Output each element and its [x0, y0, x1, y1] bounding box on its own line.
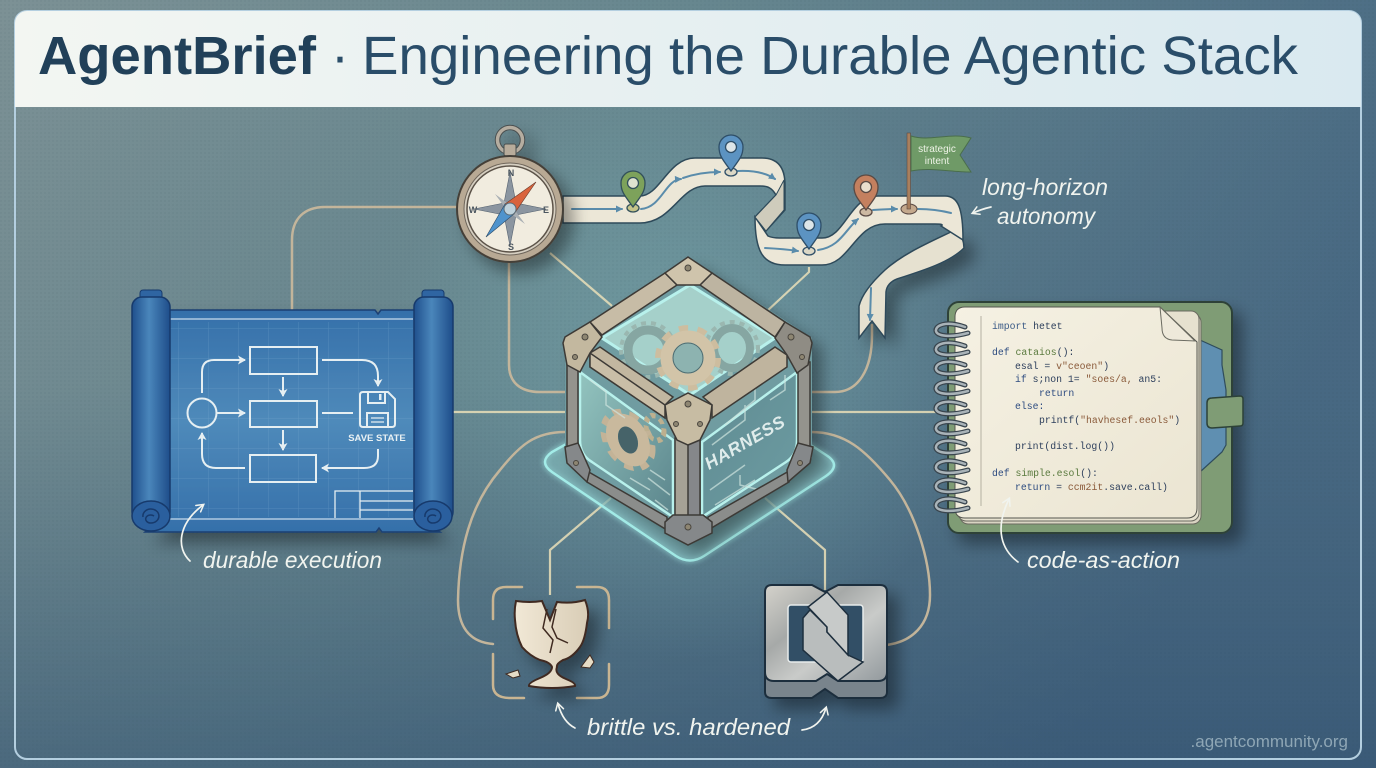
strategic intent flag [901, 133, 971, 214]
link band A [808, 592, 848, 655]
shards [506, 670, 520, 678]
brittle icon [493, 587, 609, 698]
frame bars [567, 273, 810, 530]
ribbon upper band [563, 158, 785, 231]
connectors: glowing lines [453, 253, 936, 595]
brittle vs hardened label: brittle vs. hardened [587, 714, 791, 740]
compass icon: S [508, 242, 514, 252]
map pin: blue lower [797, 213, 821, 255]
compass icon: N [508, 168, 514, 178]
icon: floppy save state [360, 392, 395, 427]
code-as-action label [1001, 499, 1180, 573]
header band [15, 11, 1361, 107]
compass icon: E [543, 205, 549, 215]
notebook clasp [1207, 396, 1243, 428]
code listing: print(dist.log()) [1015, 441, 1115, 452]
corner brackets [563, 257, 813, 545]
page stack [958, 311, 1201, 524]
block base [765, 670, 887, 698]
notebook tab [1200, 340, 1226, 472]
bolts [572, 265, 804, 530]
title: Engineering the Durable Agentic Stack [362, 26, 1299, 86]
long-horizon autonomy label: autonomy [997, 203, 1096, 229]
right roller [414, 290, 453, 531]
link holes [788, 605, 863, 662]
connectors: ropes [292, 207, 930, 645]
code listing: return [1039, 388, 1074, 399]
title: · [331, 26, 349, 86]
cube body [565, 257, 812, 545]
long-horizon autonomy label: long-horizon [982, 174, 1108, 200]
circuit traces [590, 375, 785, 510]
link band B [803, 610, 863, 681]
code listing [992, 321, 1180, 493]
ribbon fold shade [755, 180, 784, 231]
code page [955, 307, 1197, 518]
ribbon tail [859, 229, 964, 338]
map pin: blue [719, 135, 743, 176]
code listing: esal = v"ceoen") [1015, 361, 1109, 372]
cube glass faces [602, 285, 775, 395]
code listing: if s;non 1= "soes/a, an5: [1015, 374, 1162, 385]
strategic intent flag: intent [925, 156, 949, 167]
hardened link icon [765, 585, 887, 698]
map pin: green [621, 171, 645, 212]
block face [765, 585, 887, 681]
left roller [132, 290, 170, 531]
notebook [936, 302, 1243, 533]
code-as-action label: code-as-action [1027, 547, 1180, 573]
path arrows [572, 171, 951, 320]
compass icon: W [469, 205, 478, 215]
blueprint scroll [132, 290, 453, 532]
spiral binding [936, 324, 968, 511]
long-horizon autonomy label [973, 174, 1108, 229]
code listing: else: [1015, 401, 1044, 412]
strategic intent flag: strategic [918, 144, 956, 155]
brittle vs hardened label [558, 704, 826, 740]
code listing: def simple.esol(): [992, 468, 1098, 479]
interior gears [621, 322, 758, 387]
durable execution label [181, 505, 382, 573]
watermark: .agentcommunity.org [1191, 732, 1348, 751]
compass icon [457, 128, 563, 262]
title: AgentBrief [38, 26, 317, 86]
code listing: def cataios(): [992, 347, 1074, 358]
code listing: printf("havhesef.eeols") [1039, 415, 1180, 426]
harness cube [563, 257, 813, 545]
arrow: code-as-action [1001, 499, 1018, 562]
code listing: return = ccm2it.save.call) [1015, 482, 1168, 493]
map pin: orange [854, 175, 878, 216]
cracked goblet [515, 600, 588, 688]
cube platform [545, 425, 834, 560]
arrow: brittle [558, 704, 575, 728]
harness label: HARNESS [701, 411, 789, 473]
save state label: SAVE STATE [348, 433, 406, 444]
arrow: autonomy [973, 207, 991, 213]
notebook cover [948, 302, 1232, 533]
long-horizon ribbon [563, 133, 971, 338]
blueprint sheet [145, 310, 440, 532]
arrow: hardened [802, 708, 826, 730]
arrow: durable execution [181, 505, 203, 561]
code listing: import hetet [992, 321, 1063, 332]
focus brackets [493, 587, 609, 698]
flowchart [188, 347, 413, 518]
ribbon lower band [755, 196, 963, 265]
durable execution label: durable execution [203, 547, 382, 573]
